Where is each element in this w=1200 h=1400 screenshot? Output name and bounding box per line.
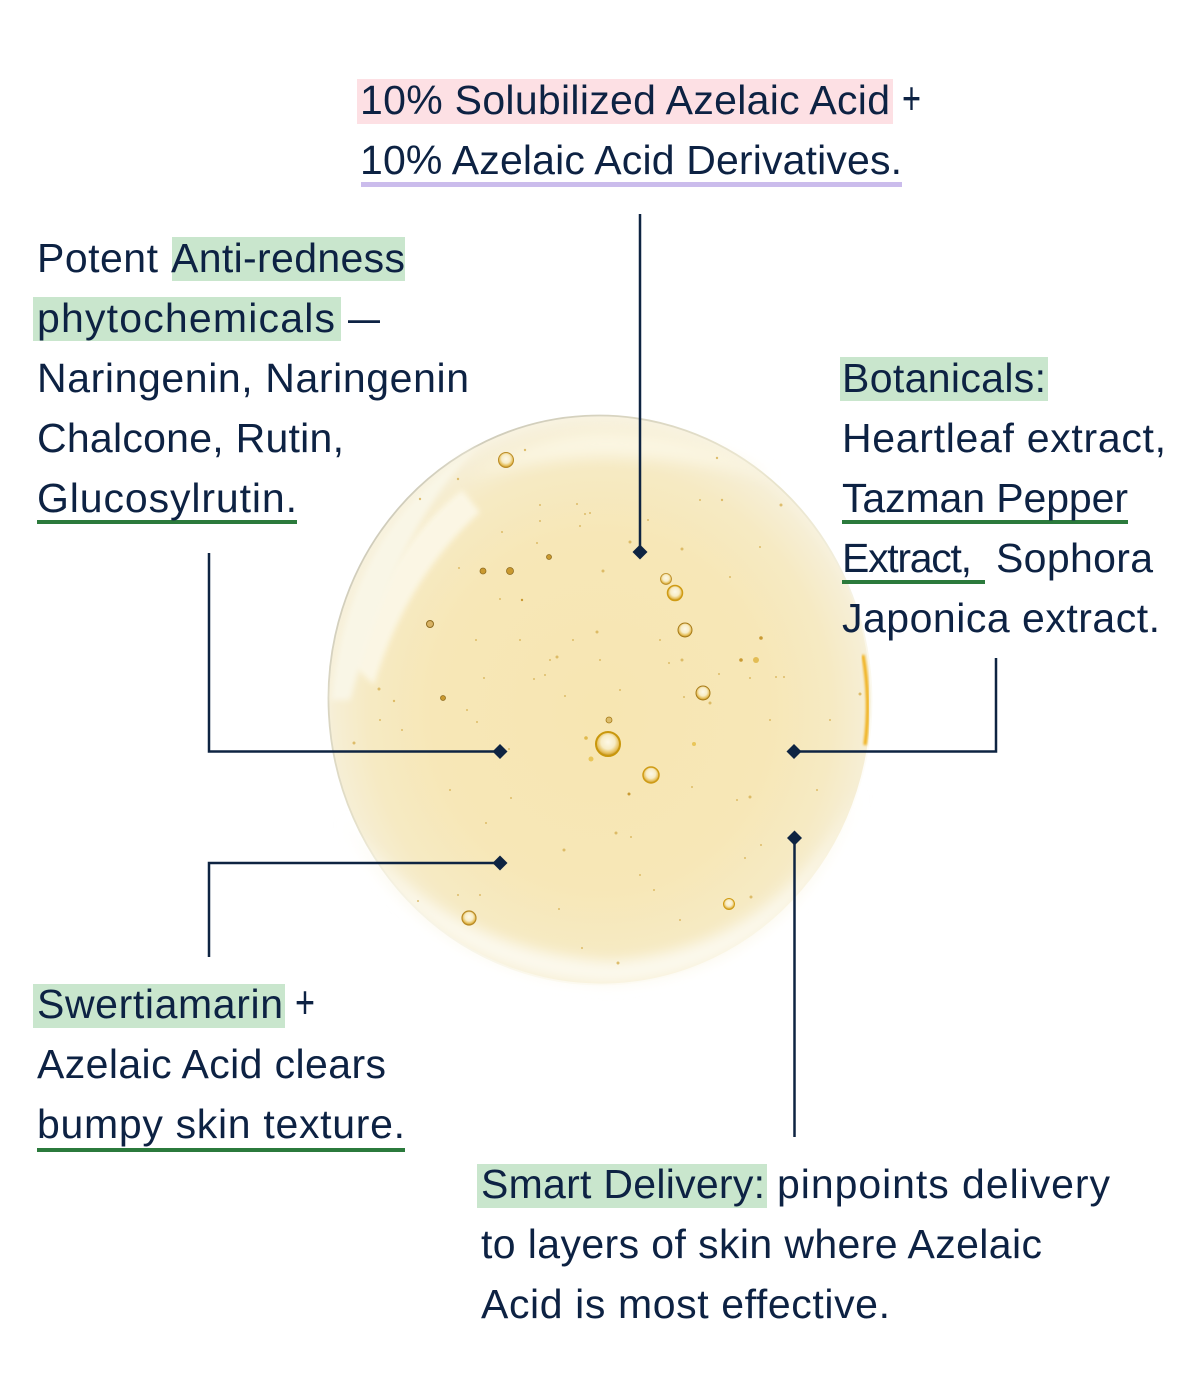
- outer left pale band: [331, 444, 480, 700]
- left highlight glare: [353, 490, 480, 685]
- green highlight: [477, 1164, 767, 1208]
- green underlines: [842, 520, 1128, 584]
- callout text: Heartleaf extract,: [842, 415, 1166, 461]
- callout text: +: [295, 976, 315, 1028]
- right amber edge: [863, 655, 868, 745]
- callout text: Japonica extract.: [842, 595, 1160, 641]
- callout text: Azelaic Acid clears: [37, 1041, 386, 1087]
- lower pale rim glow: [345, 790, 860, 984]
- leader line: left callout to droplet: [209, 553, 508, 759]
- tiny suspended particles: [352, 449, 862, 964]
- callout text: phytochemicals: [37, 295, 335, 341]
- callout text: +: [902, 72, 921, 124]
- callout: smart delivery: [477, 1161, 1110, 1327]
- callout text: Tazman Pepper: [842, 475, 1128, 521]
- callout: azelaic acid: [357, 72, 921, 187]
- pink highlight: [357, 79, 893, 124]
- callout text: Sophora: [996, 535, 1153, 581]
- green underline: [37, 520, 297, 524]
- callout text: Glucosylrutin.: [37, 475, 297, 521]
- callout text: [37, 235, 469, 521]
- callout text: Botanicals:: [842, 355, 1046, 401]
- callout text: to layers of skin where Azelaic: [481, 1221, 1042, 1267]
- green highlight: [33, 237, 405, 341]
- droplet rim: [314, 402, 886, 998]
- leader line: bottom callout to droplet: [787, 830, 802, 1137]
- large bubbles: [426, 452, 763, 925]
- callout text: —: [348, 295, 380, 341]
- oil droplet illustration: [313, 401, 887, 999]
- purple underline: [361, 182, 902, 187]
- callout text: Swertiamarin: [37, 981, 283, 1027]
- callout text: Acid is most effective.: [481, 1281, 890, 1327]
- callout text: Chalcone, Rutin,: [37, 415, 344, 461]
- callout text: Extract,: [842, 535, 972, 581]
- leader line: right callout to droplet: [786, 658, 996, 759]
- callout text: 10% Solubilized Azelaic Acid: [360, 77, 890, 123]
- green highlight: [33, 984, 285, 1028]
- callout: anti-redness phytochemicals: [33, 235, 469, 524]
- callout text: [842, 355, 1166, 641]
- leader line: top callout to droplet: [632, 214, 648, 560]
- callout text: [37, 976, 405, 1147]
- callout text: Anti-redness: [171, 235, 405, 281]
- callout text: 10% Azelaic Acid Derivatives.: [360, 137, 902, 183]
- callout text: pinpoints delivery: [777, 1161, 1110, 1207]
- top highlight arc: [470, 432, 770, 478]
- green underline: [37, 1148, 405, 1152]
- callout text: Naringenin, Naringenin: [37, 355, 469, 401]
- callout text: Potent: [37, 235, 159, 281]
- droplet body: [313, 401, 887, 999]
- callout text: Smart Delivery:: [481, 1161, 765, 1207]
- callout text: bumpy skin texture.: [37, 1101, 405, 1147]
- green highlight: [840, 357, 1048, 401]
- callout text: [481, 1161, 1110, 1327]
- leader line: bottom-left callout to droplet: [209, 856, 508, 957]
- callout: botanicals: [840, 355, 1166, 641]
- callout text: [360, 72, 921, 183]
- callout: swertiamarin: [33, 976, 405, 1152]
